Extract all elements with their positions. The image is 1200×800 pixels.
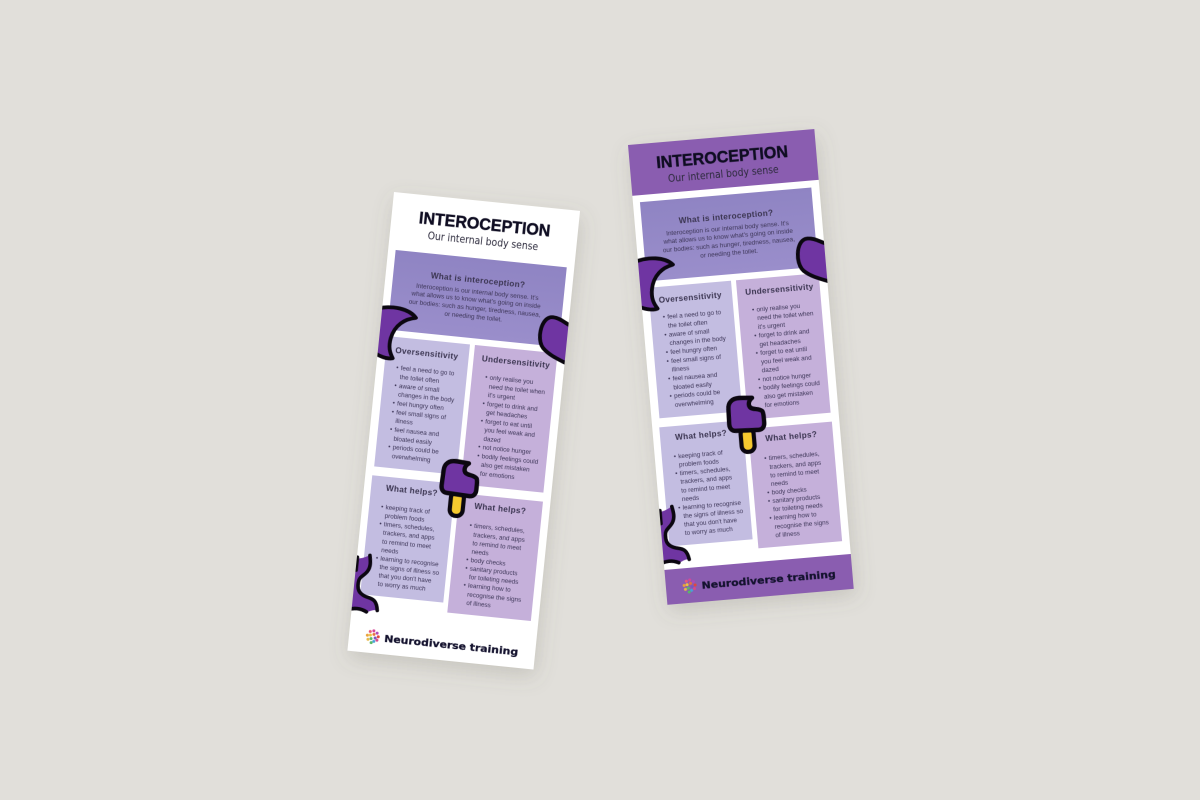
panel: oversensitivity: • [669,393,672,401]
panel: what helps, oversensitivity: needs [381,547,399,556]
panel: undersensitivity: forget to eat until [760,346,807,357]
panel: oversensitivity: changes in the body [398,392,455,404]
panel: what helps, oversensitivity: • [379,521,382,528]
panel: what helps, oversensitivity: that you don't have [378,573,432,585]
panel: oversensitivity: feel hungry often [397,400,445,412]
panel: what helps, undersensitivity: to remind to meet [770,468,820,479]
panel: undersensitivity: • [754,333,757,340]
panel: what helps, undersensitivity: What helps? [765,430,817,443]
panel: undersensitivity: • [752,307,755,314]
panel: what helps, oversensitivity: to worry as much [377,581,426,593]
panel: undersensitivity: forget to drink and [487,401,538,413]
panel: what is interoception: What is interoception? [430,271,526,290]
subtitle: Our internal body sense [668,165,779,185]
panel: what is interoception: or needing the toilet. [700,248,759,260]
panel: oversensitivity: • [668,376,671,383]
panel: oversensitivity: feel a need to go to [667,309,722,321]
panel: what helps, undersensitivity: • [465,565,468,572]
panel: what helps, undersensitivity: body checks [470,557,506,568]
panel: what helps, oversensitivity: • [381,504,384,511]
panel: what helps, undersensitivity: trackers, and apps [769,459,821,471]
panel: undersensitivity: • [756,350,758,358]
footer brand name: Neurodiverse training [701,569,836,592]
panel: oversensitivity: feel nausea and [394,427,440,438]
icon: squiggle sticker [352,553,380,614]
panel: what helps, undersensitivity: • [764,456,767,463]
panel: oversensitivity: periods could be [392,444,439,456]
panel: what helps, oversensitivity: • [678,505,681,512]
panel: what is interoception [388,250,567,347]
panel: what is interoception: or needing the toilet. [444,311,503,324]
panel: what helps, undersensitivity: body checks [771,487,807,496]
panel: what helps, undersensitivity: needs [771,479,788,488]
panel: undersensitivity: dazed [762,366,780,375]
panel: undersensitivity: bodily feelings could [763,380,821,392]
panel: what helps, oversensitivity: What helps? [386,484,438,498]
panel: undersensitivity: • [758,377,761,384]
panel: undersensitivity: not notice hunger [762,372,811,383]
icon: popsicle sticker [439,460,479,518]
panel: what helps, undersensitivity: recognise the signs [774,519,829,531]
panel: what helps, oversensitivity: learning to recognise [682,500,742,512]
footer logo [682,578,697,594]
panel: oversensitivity [374,336,470,475]
panel: undersensitivity: for emotions [480,470,515,481]
panel: what helps, oversensitivity: the signs of illness so [683,508,744,520]
panel: oversensitivity: illness [395,418,413,427]
panel: what helps, undersensitivity: learning how to [774,511,817,522]
panel: undersensitivity: • [478,444,481,451]
panel: what is interoception: Interoception is our internal body sense. It's [416,283,539,302]
panel: what helps, oversensitivity: problem foods [384,513,425,524]
panel: what helps, oversensitivity: needs [682,495,699,503]
panel: what helps, undersensitivity: • [469,523,472,530]
header band [628,129,819,196]
panel: what helps, undersensitivity: What helps? [474,502,527,516]
subtitle: Our internal body sense [427,231,539,253]
panel: oversensitivity: overwhelming [391,453,431,464]
icon: squiggle sticker [657,505,689,564]
panel: what helps, oversensitivity [360,475,455,603]
panel: what helps, undersensitivity [447,493,543,621]
panel: oversensitivity [648,281,742,418]
panel: what helps, oversensitivity: timers, schedules, [383,521,435,533]
title: INTEROCEPTION [418,208,551,241]
panel: what helps, undersensitivity: of illness [466,600,491,609]
panel: undersensitivity: only realise you [756,303,801,314]
panel: undersensitivity: you feel weak and [761,355,812,366]
panel: undersensitivity: only realise you [489,375,534,386]
panel: undersensitivity: it's urgent [488,392,515,402]
panel: oversensitivity: bloated easily [393,436,433,446]
panel: undersensitivity: not notice hunger [482,444,531,456]
panel: what helps, undersensitivity: learning how to [468,583,511,594]
panel: undersensitivity [461,345,558,493]
card: purple header version [625,129,858,605]
panel: oversensitivity: • [663,314,665,321]
panel: what helps, oversensitivity: to remind to meet [681,483,731,495]
panel: what helps, undersensitivity: recognise the signs [467,591,522,604]
panel: undersensitivity: get headaches [759,338,801,348]
panel: what is interoception: our bodies: such as hunger, tiredness, nausea, [663,236,795,254]
panel: what helps, oversensitivity: that you don't have [684,517,738,529]
panel: undersensitivity: • [480,418,483,425]
panel: what is interoception [640,187,818,281]
panel: what is interoception: Interoception is our internal body sense. It's [666,220,789,237]
panel: undersensitivity: forget to drink and [759,328,810,340]
panel: undersensitivity: you feel weak and [484,427,536,439]
panel: what helps, oversensitivity: learning to recognise [380,555,439,568]
panel: oversensitivity: the toilet often [668,319,708,330]
panel: oversensitivity: • [666,349,668,357]
panel: oversensitivity: • [396,365,399,372]
panel: undersensitivity: for emotions [764,400,800,410]
panel: what helps, oversensitivity: trackers, and apps [680,475,732,486]
panel: what helps, oversensitivity: the signs of illness so [379,564,440,577]
panel: what helps, oversensitivity: • [675,471,678,478]
panel: undersensitivity: also get mistaken [764,390,814,401]
panel: what helps, undersensitivity: to remind to meet [472,540,522,552]
panel: what helps, undersensitivity: • [767,490,770,497]
panel: what helps, undersensitivity [748,422,842,548]
panel: what helps, undersensitivity: • [768,498,771,505]
panel: oversensitivity: the toilet often [399,374,440,385]
panel: oversensitivity: bloated easily [673,381,713,391]
panel: oversensitivity: Oversensitivity [658,290,722,305]
panel: what helps, oversensitivity: • [674,454,676,461]
icon: moon sticker [635,257,677,311]
panel: oversensitivity: • [391,409,394,416]
panel: oversensitivity: feel a need to go to [400,365,455,378]
panel: undersensitivity: it's urgent [758,322,786,331]
footer brand name: Neurodiverse training [384,634,519,658]
panel: oversensitivity: feel hungry often [670,345,718,356]
panel: oversensitivity: periods could be [674,389,721,400]
panel: oversensitivity: feel nausea and [672,372,718,383]
panel: oversensitivity: • [394,382,397,390]
panel: undersensitivity: need the toilet when [757,310,814,322]
footer logo [365,629,380,645]
panel: what helps, undersensitivity: • [769,515,772,522]
panel: oversensitivity: feel small signs of [671,354,722,365]
panel: undersensitivity: need the toilet when [488,383,546,396]
panel: what is interoception: What is interoception? [678,208,774,225]
panel: what helps, oversensitivity: problem foods [679,459,719,469]
card: white version [344,192,584,670]
icon: heart sticker [537,316,573,365]
panel: undersensitivity: Undersensitivity [481,354,551,370]
panel: what helps, oversensitivity: to remind to meet [382,538,431,550]
panel: undersensitivity: bodily feelings could [481,453,539,466]
panel: what helps, undersensitivity: sanitary products [772,494,821,505]
panel: oversensitivity: overwhelming [675,399,714,409]
panel: undersensitivity: also get mistaken [480,462,530,474]
panel: oversensitivity: • [392,400,395,407]
panel: what is interoception: our bodies: such as hunger, tiredness, nausea, [408,299,541,319]
panel: what helps, undersensitivity: timers, schedules, [769,451,820,462]
panel: oversensitivity: feel small signs of [396,409,447,421]
panel: what helps, oversensitivity: trackers, and apps [383,530,435,542]
panel: what helps, undersensitivity: of illness [775,530,800,539]
panel: undersensitivity: • [759,385,761,392]
panel: oversensitivity: • [666,358,669,365]
icon: popsicle sticker [727,396,767,453]
panel: what helps, oversensitivity: keeping track of [385,504,430,516]
panel: what helps, oversensitivity: keeping track of [678,450,723,460]
panel: oversensitivity: illness [672,365,690,374]
panel: undersensitivity: • [477,453,480,460]
panel: what helps, undersensitivity: timers, schedules, [474,523,525,535]
panel: oversensitivity: aware of small [399,383,440,394]
footer band [664,554,854,605]
panel: oversensitivity: • [390,426,393,434]
panel: undersensitivity: • [485,374,488,381]
panel: undersensitivity: dazed [483,436,501,444]
panel: what helps, oversensitivity: What helps? [675,428,727,442]
panel: what helps, oversensitivity: timers, schedules, [679,466,731,477]
panel: what helps, undersensitivity: for toileting needs [469,574,519,586]
panel: oversensitivity: changes in the body [669,335,727,347]
icon: heart sticker [796,236,828,283]
panel: what helps, undersensitivity: • [466,557,469,564]
panel: what helps, undersensitivity: • [463,582,466,589]
panel: oversensitivity: • [388,444,391,451]
icon: moon sticker [374,306,417,361]
panel: undersensitivity: Undersensitivity [745,282,814,297]
panel: undersensitivity: forget to eat until [485,418,532,430]
panel: oversensitivity: aware of small [669,328,710,339]
panel: undersensitivity [736,273,831,420]
panel: what is interoception: what allows us to know what's going on inside [410,290,541,311]
panel: oversensitivity: • [664,332,667,339]
panel: what is interoception: what allows us to know what's going on inside [662,228,794,246]
panel: what helps, undersensitivity: trackers, and apps [473,532,525,544]
panel: what helps, oversensitivity: to worry as much [685,526,733,537]
panel: oversensitivity: Oversensitivity [395,346,459,361]
title: INTEROCEPTION [656,142,789,172]
panel: undersensitivity: get headaches [486,409,528,421]
panel: what helps, oversensitivity: • [376,555,378,562]
panel: what helps, undersensitivity: sanitary products [469,566,518,578]
panel: what helps, undersensitivity: for toileting needs [773,502,823,514]
panel: what helps, oversensitivity [659,420,753,546]
panel: what helps, undersensitivity: needs [471,549,489,557]
panel: undersensitivity: • [482,400,485,407]
